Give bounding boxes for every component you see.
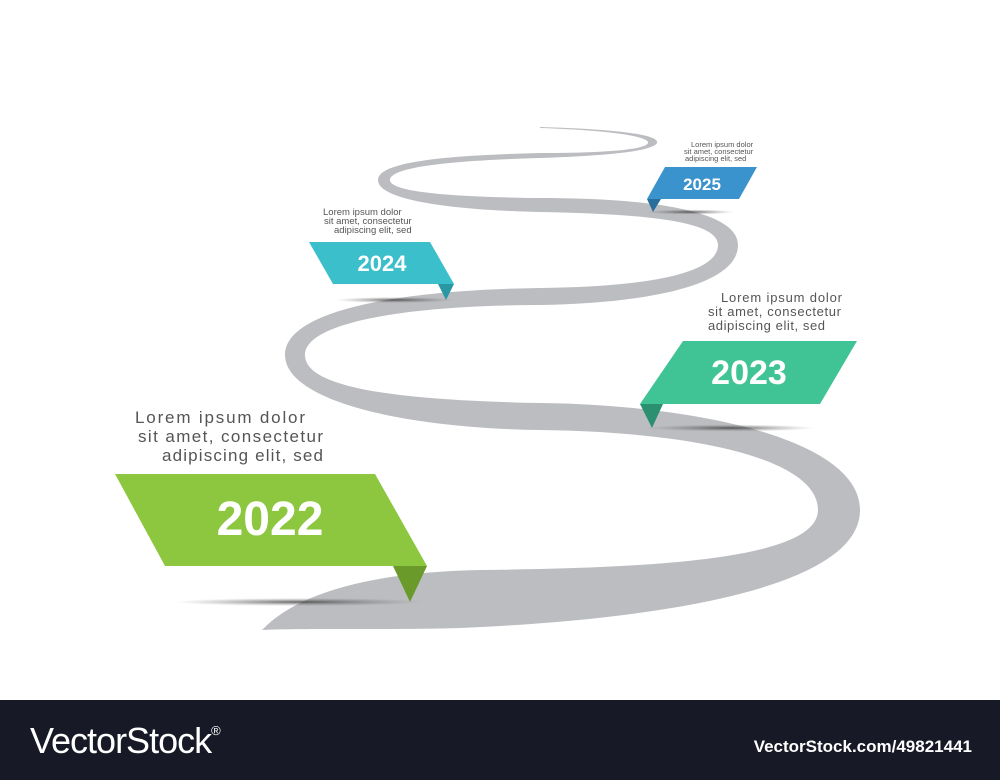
marker 2022: 2022 [217, 493, 323, 546]
text 2024: Lorem ipsum dolor [323, 207, 402, 218]
text 2023 [708, 290, 843, 333]
text 2025: adipiscing elit, sed [685, 154, 746, 163]
text 2025: Lorem ipsum dolor [691, 140, 754, 149]
text 2022: Lorem ipsum dolor [135, 408, 305, 427]
marker 2025 [645, 167, 757, 214]
text 2025 [684, 140, 754, 163]
text 2023: Lorem ipsum dolor [721, 290, 843, 305]
marker 2023 [640, 341, 857, 432]
text 2025: sit amet, consectetur [684, 147, 754, 156]
footer bar: VectorStock [30, 720, 211, 761]
text 2022: sit amet, consectetur [138, 427, 323, 446]
text 2022: adipiscing elit, sed [162, 446, 323, 465]
text 2023: adipiscing elit, sed [708, 318, 825, 333]
marker 2024: 2024 [358, 251, 407, 276]
marker 2024 [309, 242, 455, 303]
text 2024: sit amet, consectetur [324, 216, 412, 227]
marker 2023: 2023 [711, 354, 787, 392]
footer bar [0, 700, 1000, 780]
text 2024 [323, 207, 412, 236]
footer bar: ® [211, 723, 221, 738]
marker 2025: 2025 [683, 175, 721, 194]
text 2023: sit amet, consectetur [708, 304, 842, 319]
marker 2022 [115, 474, 427, 606]
text 2024: adipiscing elit, sed [334, 225, 412, 236]
text 2022 [135, 408, 323, 465]
footer bar: VectorStock.com/49821441 [754, 737, 972, 756]
winding road [262, 127, 860, 630]
